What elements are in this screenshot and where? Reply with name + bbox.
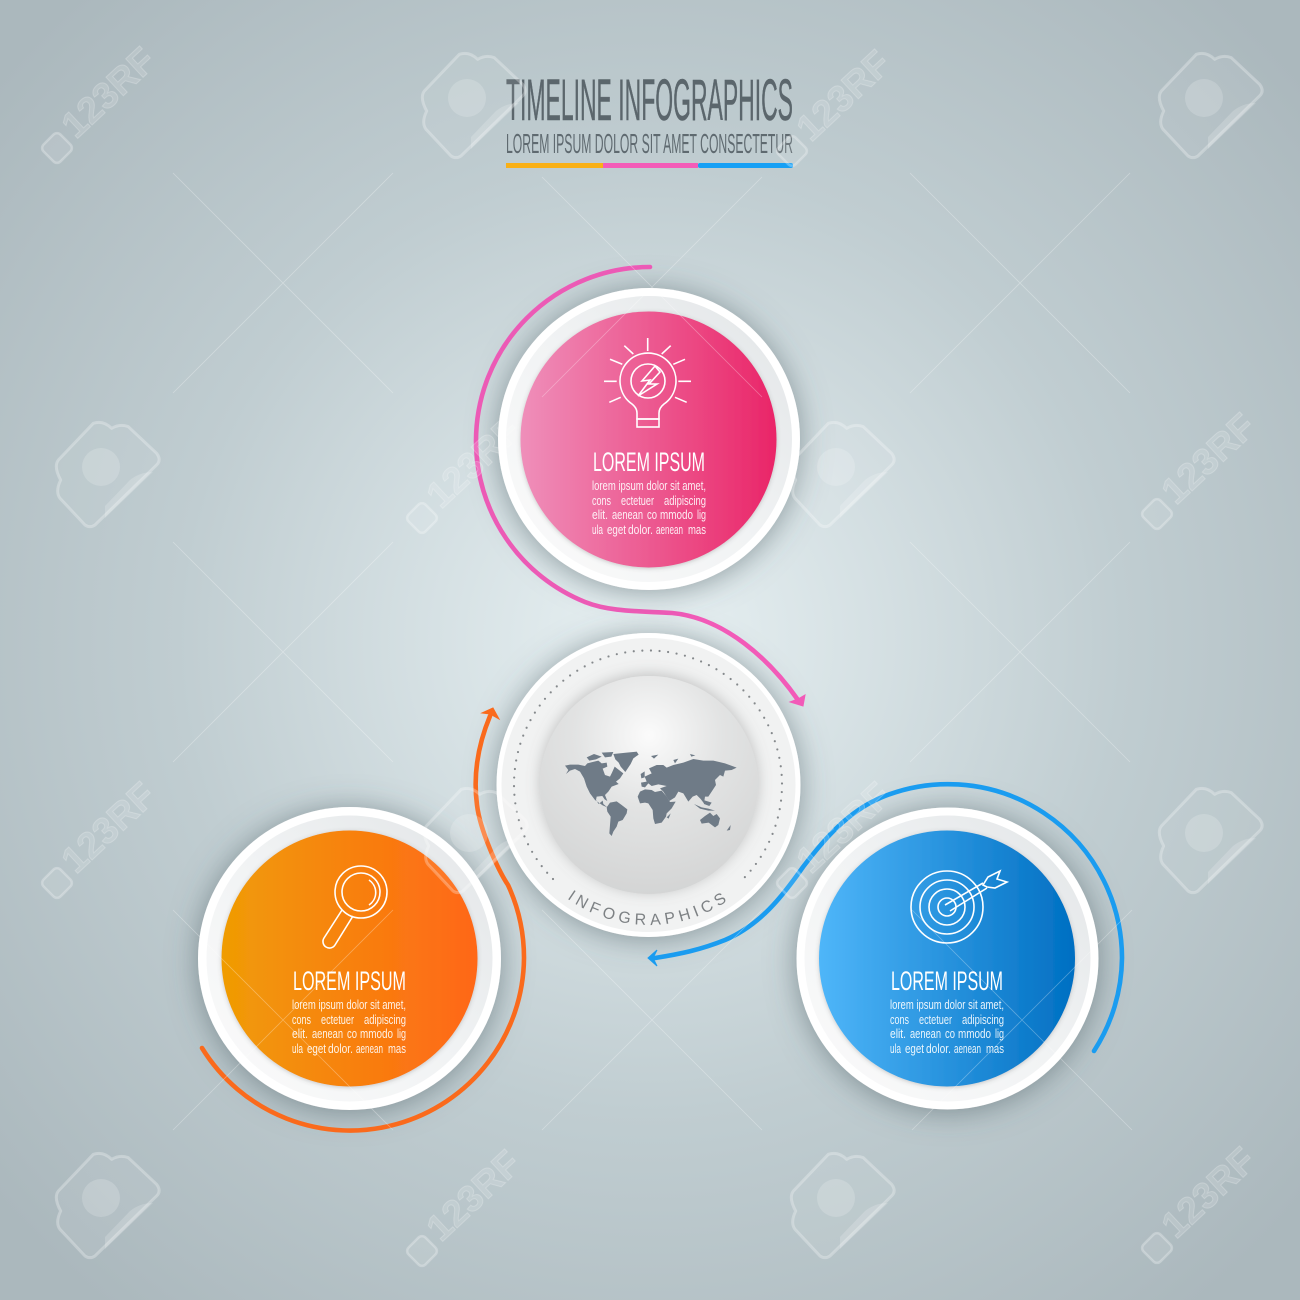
text: TIMELINE INFOGRAPHICS bbox=[506, 68, 793, 133]
body text: aenean bbox=[312, 1027, 343, 1041]
watermark stamps: 123RF bbox=[418, 409, 528, 516]
watermark stamps: 123RF bbox=[788, 774, 898, 881]
body text: mas bbox=[388, 1042, 406, 1056]
body text: mas bbox=[688, 523, 706, 537]
icon: magnifying glass bbox=[323, 866, 387, 948]
body text: adipiscing bbox=[664, 494, 706, 508]
body text: ectetuer bbox=[621, 494, 654, 508]
body text: eget bbox=[607, 523, 626, 537]
body text: aenean bbox=[910, 1027, 941, 1041]
body text: lig bbox=[995, 1027, 1004, 1041]
body text: cons bbox=[292, 1013, 311, 1027]
body text: aenean bbox=[356, 1042, 383, 1056]
blue connector arrow bbox=[648, 784, 1122, 1051]
body text: lorem ipsum dolor sit amet, bbox=[292, 998, 406, 1012]
body text: mmodo bbox=[360, 1027, 393, 1041]
body text: adipiscing bbox=[962, 1013, 1004, 1027]
heading: LOREM IPSUM bbox=[891, 966, 1003, 996]
body text: lorem ipsum dolor sit amet, bbox=[890, 998, 1004, 1012]
body text bbox=[292, 998, 406, 1056]
watermark stamps: 123RF bbox=[53, 774, 163, 881]
title block bbox=[506, 68, 793, 168]
orange step circle bbox=[198, 807, 501, 1110]
body text: ula bbox=[292, 1042, 303, 1056]
body text: aenean bbox=[656, 523, 683, 537]
body text: ula bbox=[890, 1042, 901, 1056]
body text: elit. bbox=[292, 1027, 308, 1041]
body text: mmodo bbox=[660, 508, 693, 522]
text: LOREM IPSUM DOLOR SIT AMET CONSECTETUR bbox=[506, 128, 793, 159]
body text: elit. bbox=[890, 1027, 906, 1041]
body text: dolor. bbox=[926, 1042, 951, 1056]
body text: co bbox=[347, 1027, 357, 1041]
body text: elit. bbox=[592, 508, 608, 522]
body text: aenean bbox=[612, 508, 643, 522]
body text: cons bbox=[890, 1013, 909, 1027]
body text: ectetuer bbox=[919, 1013, 952, 1027]
body text: dolor. bbox=[628, 523, 653, 537]
icon: target with arrow bbox=[911, 871, 1007, 943]
body text: cons bbox=[592, 494, 611, 508]
blue step circle bbox=[796, 808, 1098, 1110]
body text: eget bbox=[307, 1042, 326, 1056]
world map bbox=[565, 752, 737, 836]
pink step circle bbox=[498, 288, 800, 590]
watermark stamps: 123RF bbox=[788, 42, 898, 149]
curved label: INFOGRAPHICS bbox=[568, 890, 726, 926]
dotted ring bbox=[514, 650, 782, 879]
body text: eget bbox=[905, 1042, 924, 1056]
orange connector arrow bbox=[202, 708, 524, 1131]
icon: light bulb bbox=[604, 338, 691, 427]
body text: co bbox=[945, 1027, 955, 1041]
body text: adipiscing bbox=[364, 1013, 406, 1027]
body text: mas bbox=[986, 1042, 1004, 1056]
body text: lig bbox=[397, 1027, 406, 1041]
body text: ula bbox=[592, 523, 603, 537]
watermark stamps: 123RF bbox=[53, 39, 163, 146]
body text: lorem ipsum dolor sit amet, bbox=[592, 479, 706, 493]
tri-colour underline bbox=[506, 163, 793, 168]
heading: LOREM IPSUM bbox=[593, 447, 705, 477]
body text: ectetuer bbox=[321, 1013, 354, 1027]
body text bbox=[592, 479, 706, 537]
watermark stamps: 123RF bbox=[1153, 1139, 1263, 1246]
pink connector arrow bbox=[476, 267, 805, 706]
body text: dolor. bbox=[328, 1042, 353, 1056]
watermark stamps: 123RF bbox=[418, 1142, 528, 1249]
body text: mmodo bbox=[958, 1027, 991, 1041]
body text: co bbox=[647, 508, 657, 522]
body text: aenean bbox=[954, 1042, 981, 1056]
heading: LOREM IPSUM bbox=[293, 966, 406, 996]
watermark stamps: 123RF bbox=[1153, 405, 1263, 512]
body text: lig bbox=[697, 508, 706, 522]
centre circle bbox=[479, 617, 818, 956]
body text bbox=[890, 998, 1004, 1056]
